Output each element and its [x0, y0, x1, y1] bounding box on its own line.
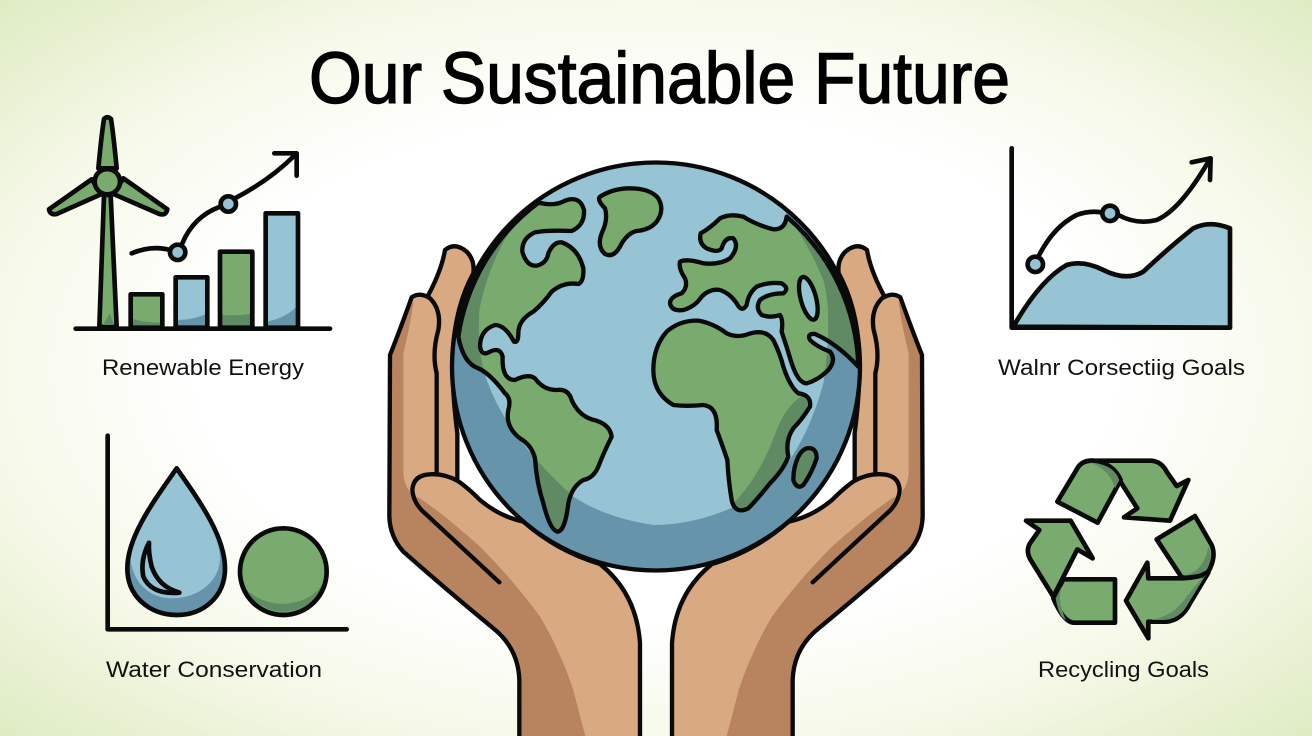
icon: green circle	[240, 528, 327, 615]
chart: water drop and circle	[108, 436, 347, 629]
bar chart	[76, 213, 330, 329]
label: water conservation: Water Conservation	[106, 657, 322, 682]
wind turbine	[49, 117, 167, 327]
title: Our Sustainable Future	[309, 39, 1010, 119]
panel: renewable energy	[49, 117, 330, 380]
panel: recycling goals	[1026, 461, 1214, 682]
left hand back finger	[428, 246, 474, 482]
illustration: hands holding globe	[389, 150, 923, 736]
label: renewable energy: Renewable Energy	[102, 355, 305, 380]
right hand	[672, 295, 923, 736]
continents	[458, 188, 858, 532]
label: recycling goals: Recycling Goals	[1038, 657, 1209, 682]
panel: top right growth chart	[998, 148, 1245, 380]
globe	[452, 150, 860, 570]
left hand	[389, 295, 640, 736]
icon: recycling arrows	[1026, 461, 1214, 638]
area chart with trend line	[1012, 148, 1230, 328]
label: top right chart: Walnr Corsectiig Goals	[998, 355, 1245, 380]
icon: wind turbine and bar chart	[49, 117, 330, 329]
right hand back finger	[838, 246, 884, 482]
icon: water drop	[127, 468, 225, 615]
trend line with arrow	[132, 153, 297, 260]
panel: water conservation	[106, 436, 347, 682]
